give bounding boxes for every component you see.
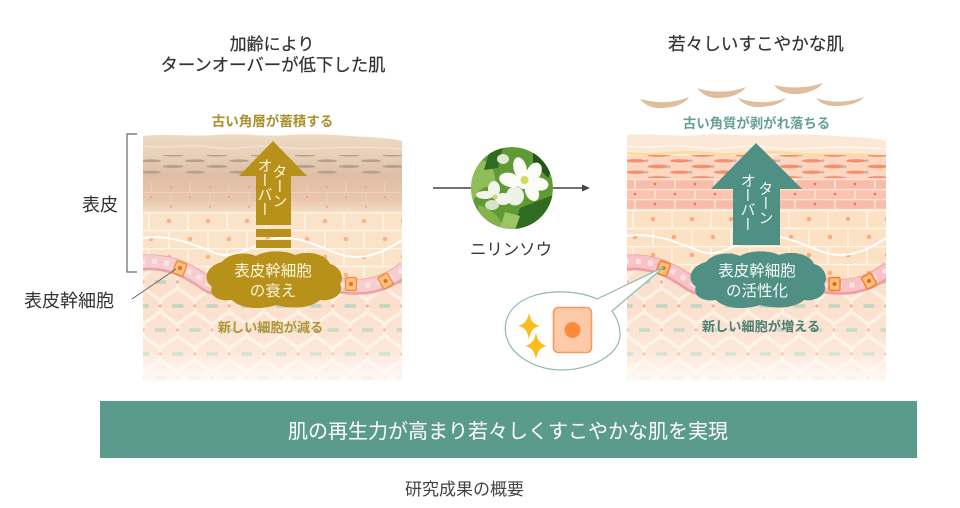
- keratinocyte cells: [143, 212, 402, 279]
- arrow: weakened turnover: ターン: [270, 164, 288, 208]
- main blossom: [498, 156, 549, 206]
- title: left panel heading: [160, 35, 386, 75]
- flakes: shedding corneum: [640, 83, 864, 108]
- cloud: stem cell activation: [691, 251, 826, 308]
- small blossom: [476, 181, 511, 210]
- banner: summary statement: [100, 401, 917, 458]
- panel: aged skin cross-section: [140, 133, 405, 381]
- icon: anemone flower photo: [471, 147, 553, 232]
- label: nirinsou: ニリンソウ: [470, 241, 552, 259]
- stem cells: [172, 260, 394, 290]
- cloud: stem cell decline: 表皮幹細胞: [234, 262, 312, 280]
- title: left panel heading: 加齢により: [230, 35, 314, 54]
- icon: sparkles: [518, 312, 540, 340]
- callout: magnified stem cell: [505, 267, 664, 370]
- cloud: stem cell activation: 表皮幹細胞: [718, 262, 796, 280]
- upper tan layers: [143, 133, 402, 213]
- title: left panel heading: ターンオーバーが低下した肌: [160, 55, 386, 75]
- arrow: active turnover: [711, 143, 802, 245]
- arrow: weakened turnover: オーバー: [256, 158, 272, 216]
- title: right panel heading: 若々しいすこやかな肌: [668, 34, 844, 54]
- label: old stratum corneum accumulates: 古い角層が蓄積する: [212, 113, 333, 129]
- cloud: stem cell decline: [207, 251, 342, 308]
- arrow: weakened turnover: [239, 141, 307, 248]
- arrow: active turnover: オーバー: [738, 173, 756, 231]
- cloud: stem cell activation: の活性化: [726, 282, 788, 300]
- banner: summary statement: 肌の再生力が高まり若々しくすこやかな肌を実現: [288, 420, 728, 443]
- basal layer: [140, 262, 405, 287]
- arrow: active turnover: ターン: [756, 181, 774, 224]
- label: fewer new cells: 新しい細胞が減る: [218, 319, 323, 335]
- dermis: [143, 262, 402, 381]
- panel: healthy skin cross-section: [624, 133, 889, 381]
- leader line to stem cell: [132, 269, 176, 299]
- label: more new cells: 新しい細胞が増える: [702, 318, 820, 334]
- bracket: epidermis range: [127, 134, 137, 272]
- label: old corneum sheds: 古い角質が剥がれ落ちる: [683, 115, 830, 131]
- cloud: stem cell decline: の衰え: [250, 282, 296, 300]
- label: epidermal stem cell: 表皮幹細胞: [24, 291, 114, 311]
- icon: cell: [554, 308, 592, 352]
- caption: 研究成果の概要: [405, 480, 524, 499]
- arrow: plant ingredient transition: [433, 184, 590, 192]
- label: epidermis: 表皮: [82, 195, 118, 215]
